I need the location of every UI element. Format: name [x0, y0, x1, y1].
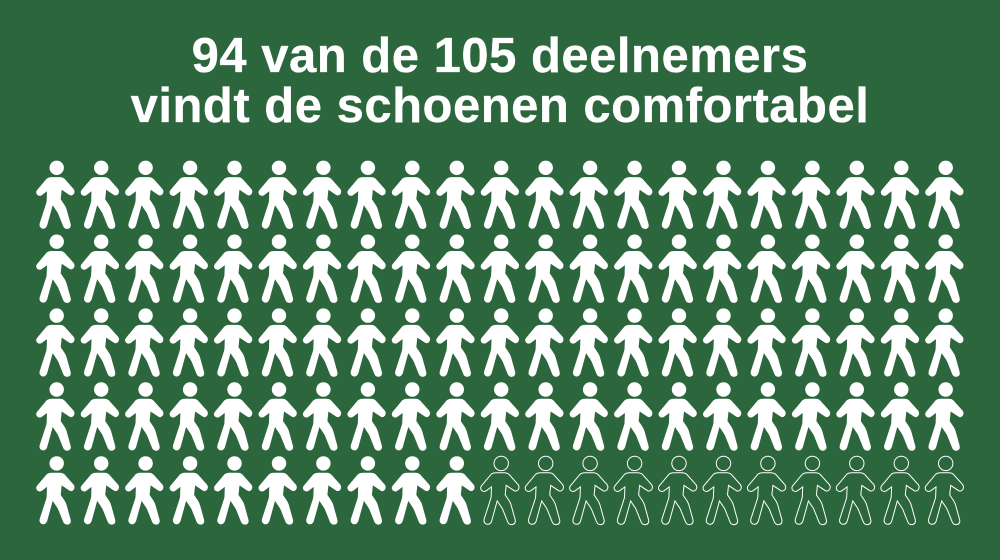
pictogram: 11 outlined walking figures: [481, 456, 964, 525]
title: vindt de schoenen comfortabel: [131, 79, 869, 133]
pictogram: 94 filled walking figures: [36, 161, 963, 525]
title: [131, 29, 869, 133]
title: 94 van de 105 deelnemers: [192, 29, 808, 83]
